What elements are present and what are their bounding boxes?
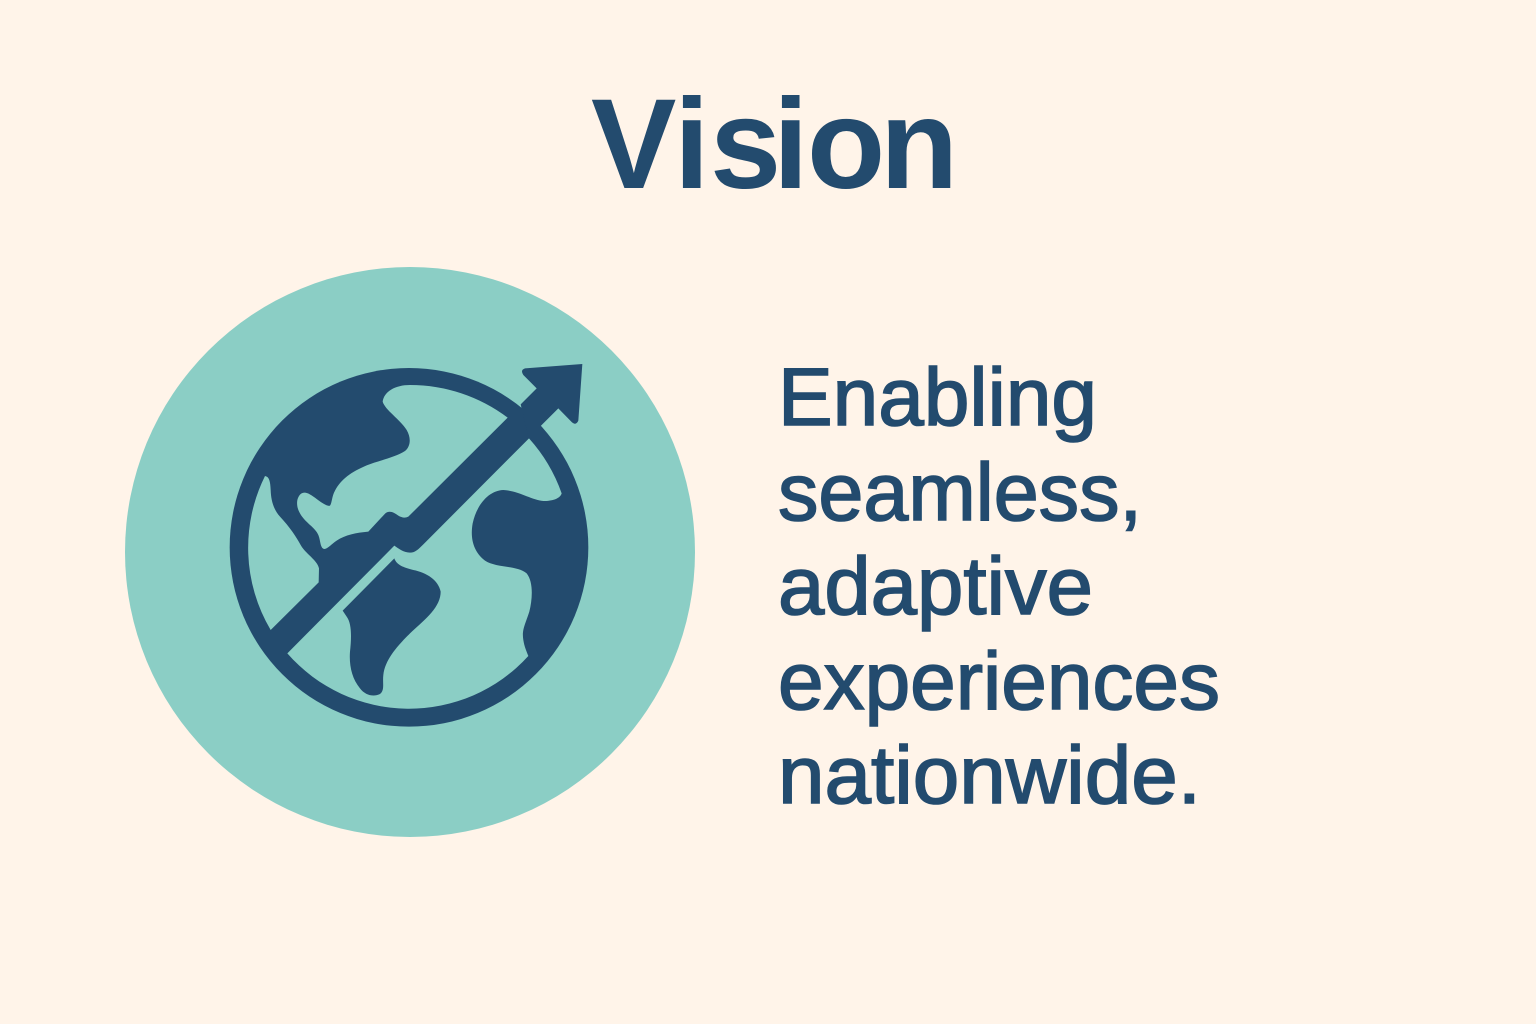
line 2: seamless, <box>778 447 1142 538</box>
line 4: experiences <box>778 636 1220 727</box>
line 3: adaptive <box>778 541 1093 632</box>
teal background circle <box>125 267 695 837</box>
text block: vision statement <box>778 352 1220 821</box>
icon: globe with arrow <box>230 364 588 727</box>
line 5: nationwide. <box>778 730 1201 821</box>
title: Vision <box>591 73 958 216</box>
icon: teal circle with globe and arrow <box>125 267 695 837</box>
line 1: Enabling <box>778 352 1097 443</box>
